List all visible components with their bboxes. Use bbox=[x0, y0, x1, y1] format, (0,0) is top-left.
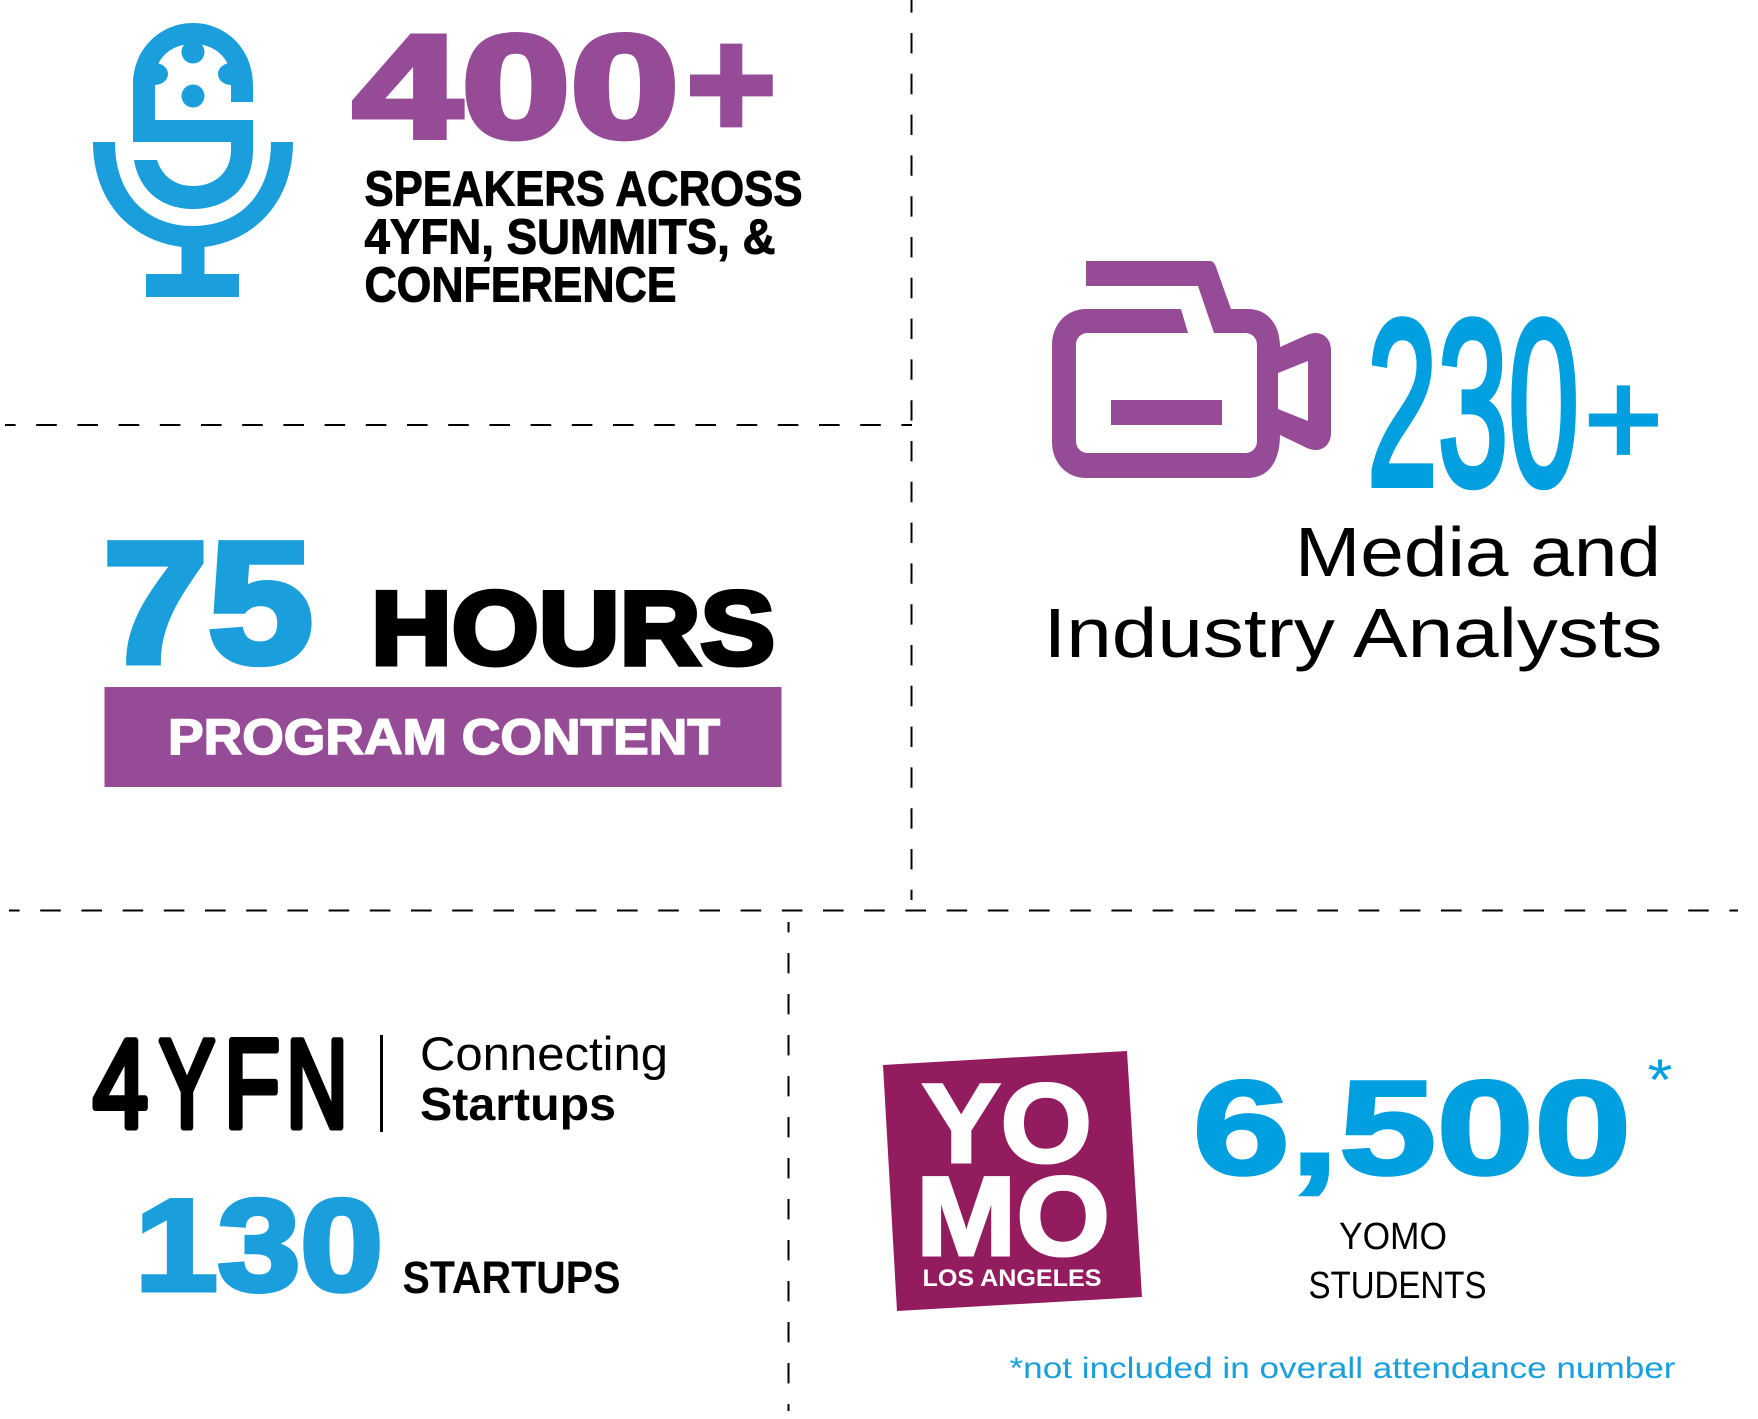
stat: 400+ bbox=[353, 0, 777, 170]
stat: 6,500: 6,500 bbox=[1192, 1054, 1632, 1203]
logo: YOMO Los Angeles: LOS ANGELES bbox=[922, 1265, 1102, 1292]
logo: 4YFN: Connecting bbox=[420, 1027, 668, 1080]
logo: 4YFN bbox=[93, 1015, 668, 1154]
icon: video camera bbox=[1052, 261, 1331, 478]
text: speakers description bbox=[364, 162, 802, 312]
heading: hours: HOURS bbox=[371, 571, 775, 687]
logo: 4YFN: Startups bbox=[420, 1078, 616, 1130]
panel: YOMO students bbox=[883, 1048, 1676, 1385]
stat: 130: 130 bbox=[135, 1172, 383, 1318]
logo: YOMO Los Angeles: MO bbox=[916, 1154, 1110, 1279]
stat: 400+: + bbox=[686, 0, 777, 170]
icon: microphone bbox=[93, 23, 293, 297]
text: speakers description: SPEAKERS ACROSS bbox=[364, 162, 802, 216]
logo: 4YFN: N bbox=[286, 1015, 348, 1154]
text: media and industry analysts bbox=[1044, 513, 1662, 672]
text: media and industry analysts: Media and bbox=[1295, 513, 1661, 591]
icon: asterisk: * bbox=[1648, 1048, 1672, 1113]
text: speakers description: CONFERENCE bbox=[364, 258, 676, 312]
banner: program content bbox=[104, 687, 782, 787]
panel: startups bbox=[93, 1015, 668, 1318]
logo: YOMO Los Angeles bbox=[883, 1051, 1142, 1311]
stat: 75: 75 bbox=[103, 507, 313, 699]
text: media and industry analysts: Industry Analysts bbox=[1044, 594, 1662, 672]
text: speakers description: 4YFN, SUMMITS, & bbox=[364, 210, 776, 264]
stat: 400+: 400 bbox=[353, 5, 679, 168]
banner: program content: PROGRAM CONTENT bbox=[168, 709, 720, 765]
logo: YOMO Los Angeles: YO bbox=[922, 1061, 1092, 1186]
panel: program hours bbox=[103, 507, 782, 787]
stat plus sign: + bbox=[1584, 343, 1663, 494]
logo: 4YFN: F bbox=[224, 1015, 280, 1154]
logo: 4YFN: Y bbox=[159, 1015, 215, 1154]
text: yomo students: YOMO bbox=[1339, 1216, 1447, 1258]
text: startups: STARTUPS bbox=[402, 1252, 620, 1303]
logo: 4YFN: 4 bbox=[93, 1015, 148, 1154]
text: yomo students: STUDENTS bbox=[1308, 1265, 1486, 1307]
panel: media and analysts bbox=[1044, 261, 1663, 672]
panel: speakers bbox=[93, 0, 802, 312]
text: yomo students bbox=[1308, 1216, 1486, 1307]
footnote: *not included in overall attendance number bbox=[1010, 1352, 1676, 1385]
stat: 230+: 230 bbox=[1367, 272, 1579, 536]
